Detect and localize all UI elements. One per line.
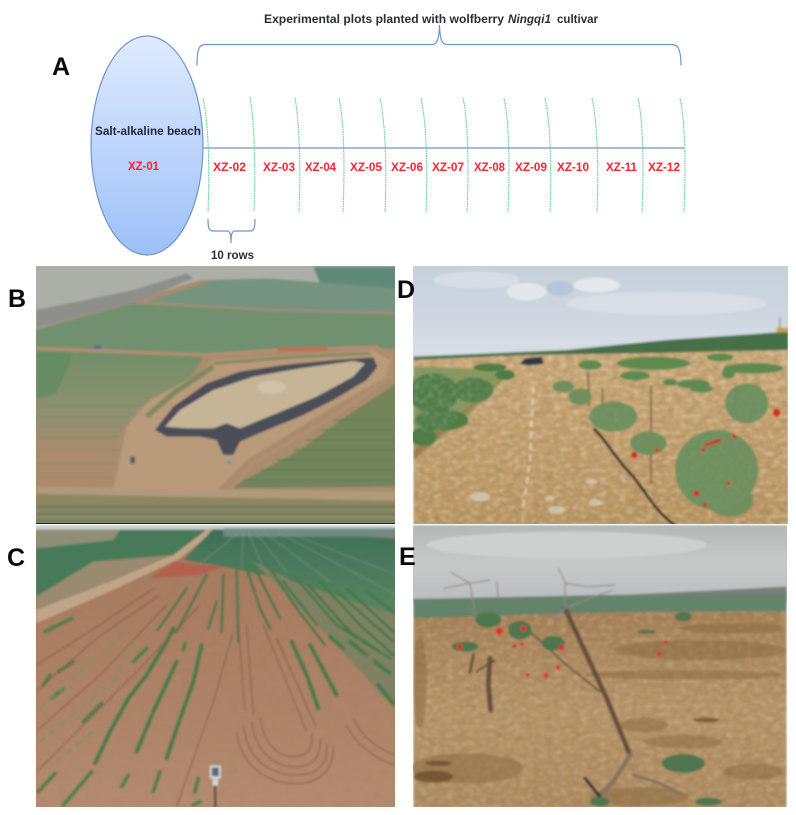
photo E: wolfberry tree on bare soil	[410, 525, 790, 808]
plot labels: XZ-04	[305, 160, 336, 174]
photo C: wolfberry rows from the air	[33, 525, 400, 812]
ellipse: salt-alkaline beach	[91, 36, 203, 255]
plot labels: XZ-03	[263, 160, 295, 174]
top brace	[197, 25, 681, 66]
plot boundaries	[203, 97, 685, 212]
panel label: A: A	[52, 53, 70, 81]
plot labels: XZ-05	[350, 160, 382, 174]
plot labels: XZ-06	[391, 160, 423, 174]
baseline of plots	[203, 147, 684, 149]
label: salt-alkaline beach: Salt-alkaline beach	[95, 126, 201, 138]
panel A: plot schematic	[91, 25, 685, 255]
photo B bottom edge	[36, 523, 395, 524]
label: 10 rows: 10 rows	[211, 248, 254, 262]
plot labels: XZ-01	[128, 159, 159, 173]
photo B: aerial view of pond	[33, 263, 400, 527]
small brace: 10 rows	[208, 219, 255, 243]
panel label: B: B	[8, 285, 26, 313]
panel label: E: E	[399, 543, 416, 571]
heading: experimental plots: cultivar	[557, 12, 598, 26]
heading: experimental plots: Experimental plots planted with wolfberry	[264, 12, 504, 26]
plot labels: XZ-09	[515, 160, 547, 174]
plot labels: XZ-08	[474, 160, 505, 174]
photo D: young wolfberry shrubs with drip line	[403, 263, 793, 527]
plot labels: XZ-07	[432, 160, 464, 174]
panel label: D: D	[397, 276, 415, 304]
heading: experimental plots: Ningqi1	[508, 12, 551, 26]
plot labels	[128, 159, 680, 174]
plot labels: XZ-10	[557, 160, 589, 174]
panel label: C: C	[7, 544, 25, 572]
plot labels: XZ-12	[648, 160, 680, 174]
plot labels: XZ-11	[606, 160, 637, 174]
plot labels: XZ-02	[213, 160, 246, 174]
